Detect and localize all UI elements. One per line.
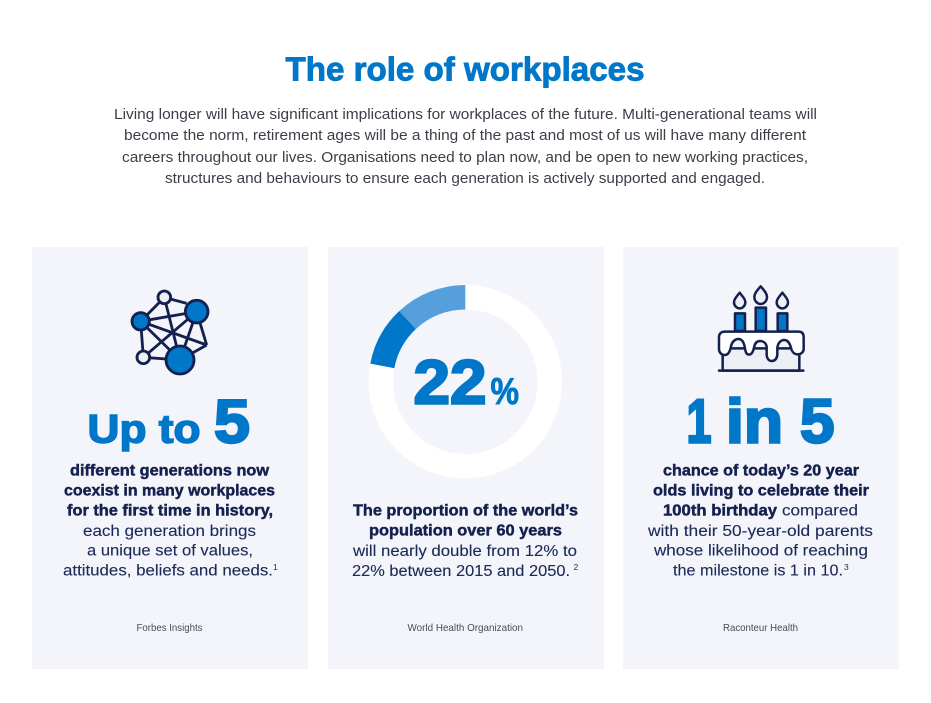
- source: World Health Organization: World Health Organization: [408, 622, 523, 634]
- description: 100th birthday: [647, 462, 873, 580]
- description: generations: different generations now: [70, 462, 270, 480]
- description: 100th birthday: 3: [844, 562, 849, 572]
- stat: 22%: %: [490, 371, 519, 412]
- description: generations: 1: [273, 562, 278, 572]
- panel: 100th birthday: [623, 247, 899, 669]
- stat: up to 5: Up to: [88, 407, 200, 451]
- stat: up to 5: [88, 387, 250, 455]
- stat: 22%: 22: [414, 348, 486, 418]
- icon: network: [132, 291, 208, 374]
- description: 100th birthday: with their 50-year-old parents: [647, 523, 873, 540]
- description: 100th birthday: the milestone is 1 in 10.: [673, 562, 843, 580]
- intro paragraph: become the norm, retirement ages will be a thing of the past and most of us will have many different: [124, 128, 806, 144]
- stat: 1 in 5: 5: [800, 388, 834, 456]
- description: population: will nearly double from 12% to: [352, 543, 577, 560]
- description: population: 2: [574, 562, 578, 572]
- description: generations: for the first time in history,: [67, 502, 273, 520]
- description: population: 22% between 2015 and 2050.: [352, 563, 570, 580]
- description: generations: attitudes, beliefs and needs.: [63, 562, 273, 580]
- icon: birthday cake: [719, 286, 804, 371]
- source: Raconteur Health: Raconteur Health: [723, 622, 798, 634]
- description: 100th birthday: compared: [782, 502, 858, 520]
- donut chart: [381, 297, 550, 466]
- description: 100th birthday: olds living to celebrate their: [653, 482, 869, 500]
- description: generations: each generation brings: [83, 523, 256, 540]
- intro paragraph: structures and behaviours to ensure each generation is actively supported and engaged.: [165, 171, 765, 187]
- stat: 1 in 5: [686, 388, 834, 456]
- description: 100th birthday: 100th birthday: [663, 502, 777, 520]
- description: population: population over 60 years: [369, 522, 562, 540]
- source: Forbes Insights: Forbes Insights: [136, 622, 202, 634]
- description: generations: coexist in many workplaces: [64, 482, 275, 500]
- stat: 1 in 5: in: [726, 388, 783, 456]
- description: generations: [63, 462, 278, 580]
- intro paragraph: [114, 107, 817, 187]
- stat: up to 5: 5: [214, 387, 250, 455]
- description: 100th birthday: whose likelihood of reaching: [653, 542, 868, 560]
- description: population: [352, 502, 578, 580]
- stat: 1 in 5: 1: [686, 388, 712, 456]
- description: generations: a unique set of values,: [87, 542, 253, 560]
- description: population: The proportion of the world’s: [353, 502, 578, 520]
- intro paragraph: careers throughout our lives. Organisations need to plan now, and be open to new working practices,: [122, 150, 808, 166]
- stat: 22%: [414, 348, 519, 418]
- title: The role of workplaces: [286, 52, 644, 88]
- panel: population: [328, 247, 604, 669]
- description: 100th birthday: chance of today’s 20 year: [663, 462, 859, 480]
- panel: generations: [32, 247, 308, 669]
- intro paragraph: Living longer will have significant implications for workplaces of the future. Multi-generational teams will: [114, 107, 817, 123]
